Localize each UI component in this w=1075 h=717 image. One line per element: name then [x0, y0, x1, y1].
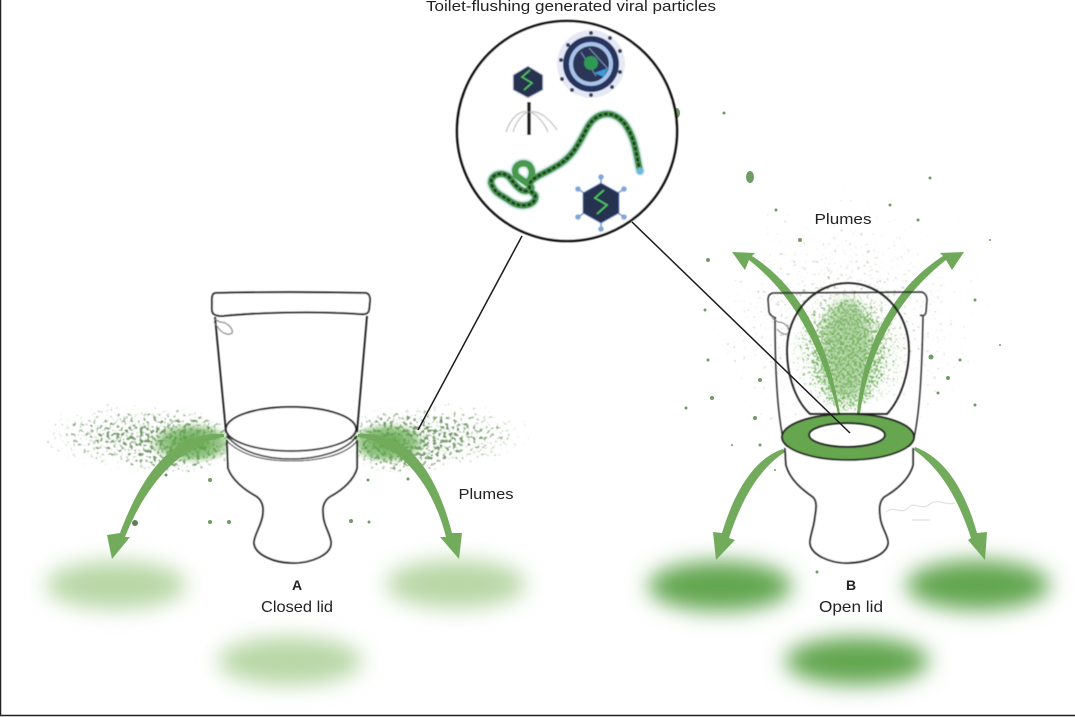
raised lid: [787, 283, 909, 414]
flush handle: [214, 319, 232, 334]
loose droplets: [132, 108, 1001, 574]
plume particles: open lid: [650, 135, 1040, 505]
label: closed lid: Closed lid: [261, 599, 333, 616]
circle: [457, 21, 677, 241]
flush handle: [772, 318, 789, 334]
label: plumes closed lid: Plumes: [458, 486, 514, 503]
arrow: open lid lower right: [914, 447, 987, 560]
leader line to open lid: [632, 222, 850, 433]
tank lid: [768, 292, 927, 318]
closed seat lid: [226, 407, 356, 451]
arrow: closed lid right: [358, 434, 462, 559]
bowl: [785, 448, 913, 563]
seat rims: [227, 436, 357, 459]
tank body: [215, 316, 367, 432]
arrow: open lid upper left: [732, 252, 840, 414]
bowl: [227, 440, 357, 563]
label: A: A: [292, 577, 302, 593]
toilet B: open lid: [768, 283, 927, 563]
settled droplet pools: closed lid: [46, 560, 526, 685]
virus: enveloped: [557, 30, 625, 98]
label: open lid: Open lid: [819, 599, 883, 616]
tank body: [775, 316, 923, 438]
magnified viral particles: [457, 21, 677, 241]
arrow: closed lid left: [107, 434, 224, 559]
virus: filamentous: [491, 114, 644, 205]
tank lid: [212, 292, 370, 316]
label: plumes open lid: Plumes: [814, 211, 872, 228]
virus: bacteriophage: [506, 66, 557, 135]
toilet A: closed lid: [212, 292, 370, 563]
leader line to closed lid: [418, 236, 522, 430]
seat ring: [782, 414, 914, 460]
settled droplet pools: open lid: [648, 560, 1050, 685]
artist signature: [886, 502, 955, 520]
virus: icosahedral with spikes: [575, 174, 627, 232]
plume particles: closed lid: [0, 386, 575, 486]
arrow: open lid upper right: [857, 252, 964, 414]
label: B: B: [846, 577, 856, 593]
arrow: open lid lower left: [713, 449, 785, 560]
